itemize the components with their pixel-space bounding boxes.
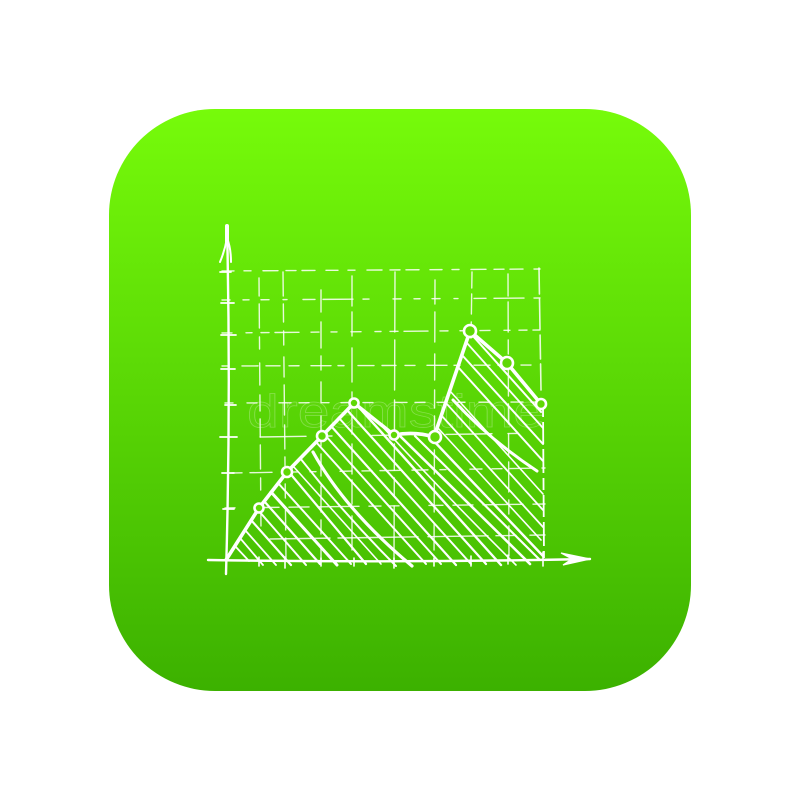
x axis with arrow (208, 552, 590, 568)
watermark text: dreamstime (247, 385, 545, 437)
y axis with arrow (220, 226, 237, 574)
panel: green rounded square (109, 109, 691, 691)
right edge of area (543, 405, 544, 558)
chart grid: dashed sketch lines (222, 268, 545, 560)
data line (226, 331, 541, 560)
area hatching (235, 335, 543, 566)
data points (254, 325, 546, 512)
